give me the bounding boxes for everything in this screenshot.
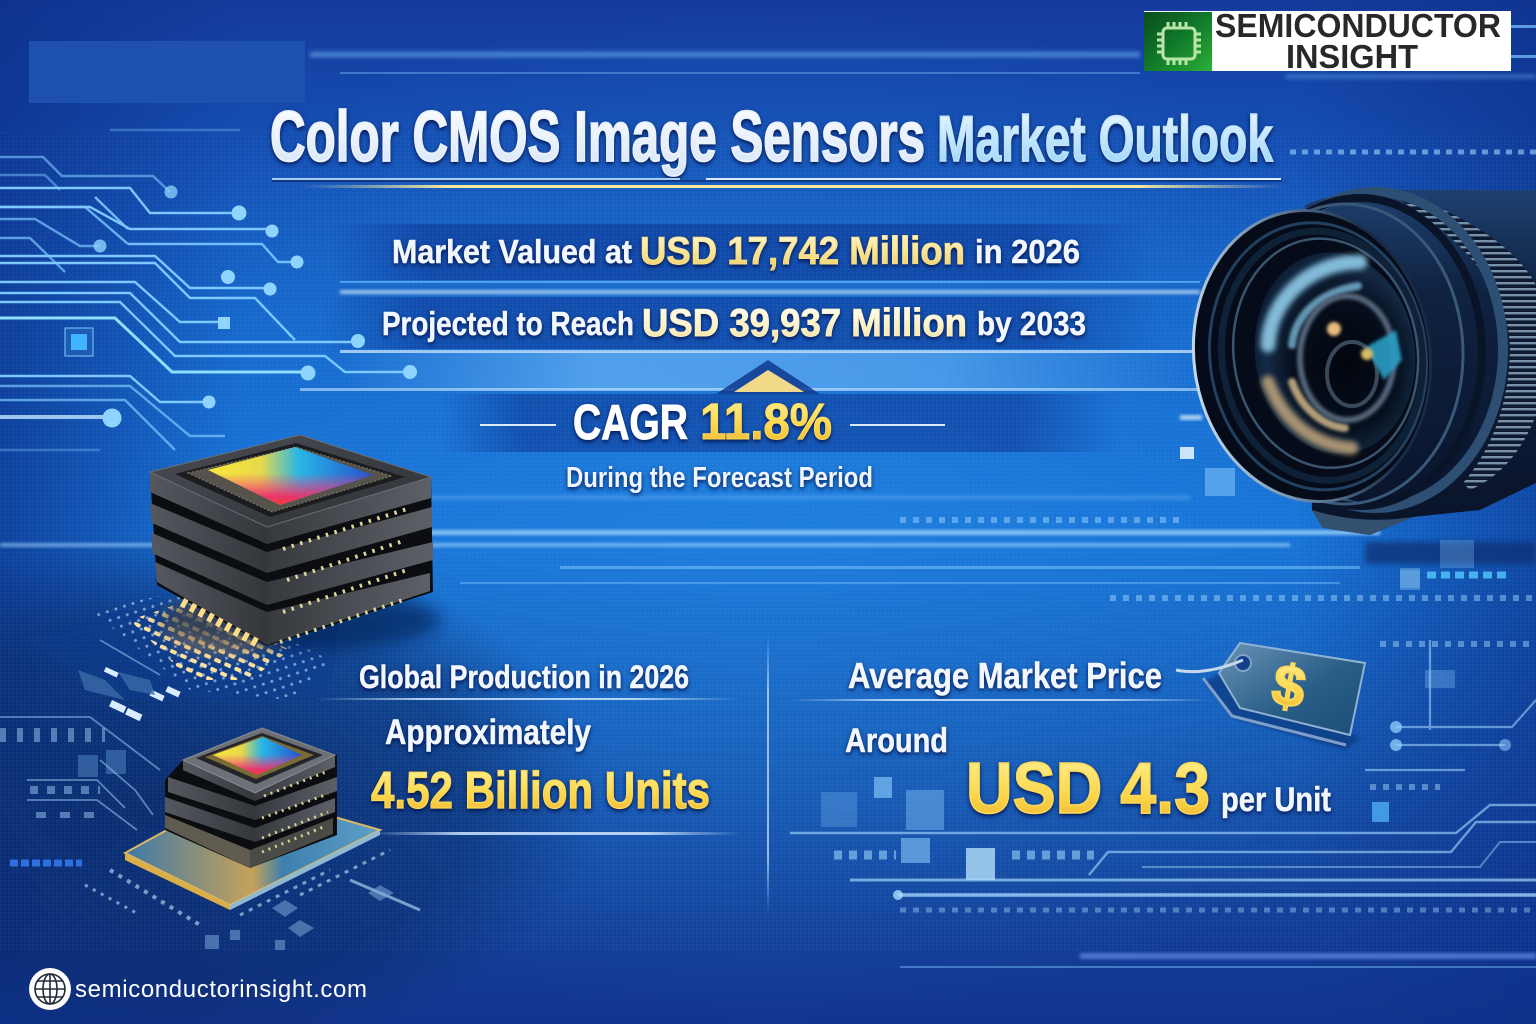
forecast period label: During the Forecast Period: [566, 462, 873, 494]
CAGR: [480, 393, 945, 450]
layer 3: [152, 533, 433, 612]
logo: Semiconductor Insight: INSIGHT: [1286, 38, 1418, 75]
layer 2: [168, 777, 337, 820]
icon: microchip: [1157, 22, 1201, 65]
circuit traces, upper left: [0, 130, 417, 450]
lens glass: [1242, 242, 1428, 464]
value: USD 4.3: [966, 749, 1210, 829]
trace nodes: [94, 186, 417, 428]
camera shadow and blocks under lens: [1180, 415, 1536, 588]
colour sensor: [208, 447, 373, 505]
website footer: [29, 968, 367, 1010]
text backing bands: [320, 224, 1160, 452]
title: Color CMOS Image Sensors: [270, 98, 925, 177]
market projection 2033: by 2033: [977, 305, 1086, 342]
arrow: up triangle: [716, 360, 820, 394]
logo: Semiconductor Insight: SEMICONDUCTOR: [1215, 7, 1501, 44]
approx label: Approximately: [385, 713, 591, 752]
left board traces: [0, 640, 160, 830]
market value 2026: in 2026: [975, 233, 1080, 270]
title: Market Outlook: [937, 102, 1274, 175]
logo: Semiconductor Insight: [1144, 7, 1511, 75]
pixel squares, lower centre: [821, 777, 1094, 880]
market value 2026: [392, 230, 1080, 273]
small stacked chip on circuit board: [125, 728, 380, 910]
market projection 2033: [382, 302, 1086, 345]
layer 2: [150, 503, 432, 580]
lens barrel: [1305, 190, 1536, 535]
circuit board base: [125, 790, 380, 910]
circuit board texture under chips: [0, 590, 420, 950]
panel: global production: [315, 659, 740, 835]
stack silhouette: [165, 728, 337, 868]
icon: small sensor square: [65, 328, 93, 356]
layer 1 top: [150, 435, 431, 549]
icon: globe: [29, 968, 71, 1010]
divider: [767, 635, 769, 913]
camera lens: [1175, 190, 1536, 535]
title underline: [272, 178, 1285, 188]
panel: average market price: per Unit: [1221, 781, 1331, 819]
dotted traces below small chip: [85, 850, 420, 925]
colour sensor: [213, 737, 302, 775]
value: 4.52 Billion Units: [371, 762, 710, 820]
layer 4: [155, 562, 430, 645]
around label: Around: [845, 722, 948, 760]
circuit traces, lower right: [790, 805, 1536, 910]
market value 2026: Market Valued at: [392, 233, 632, 270]
website footer: semiconductorinsight.com: [75, 976, 367, 1003]
CAGR: 11.8%: [700, 393, 832, 450]
gold contact pins: [182, 602, 257, 643]
market value 2026: USD 17,742 Million: [640, 230, 965, 273]
pixel blocks and traces, right side: [900, 520, 1536, 822]
heading: Global Production in 2026: [359, 659, 689, 695]
front ring: [1175, 195, 1449, 517]
icon: price tag: $: [1267, 652, 1310, 721]
icon: price tag: [1176, 643, 1365, 750]
heading: Average Market Price: [848, 655, 1162, 696]
panel: average market price: [790, 643, 1365, 829]
market projection 2033: USD 39,937 Million: [642, 302, 967, 345]
CAGR: CAGR: [573, 396, 688, 450]
market projection 2033: Projected to Reach: [382, 305, 634, 342]
outer barrel rings: [1227, 192, 1503, 508]
blank patch, upper left: [29, 41, 305, 103]
focus ring ridges: [1400, 195, 1536, 490]
layer 4: [165, 815, 333, 868]
large stacked image sensor chip: [150, 435, 440, 650]
stack silhouette: [150, 435, 433, 646]
pads and small components: [104, 667, 181, 721]
dotted rule right of title: [1290, 150, 1536, 154]
layer 1 top: [183, 728, 335, 801]
layer 3: [165, 797, 335, 842]
lens reflections: [1327, 322, 1402, 380]
